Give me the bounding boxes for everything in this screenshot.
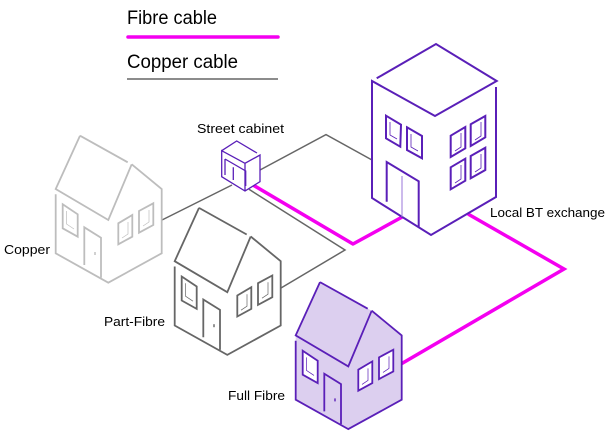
legend: copper cable: Copper cable: [127, 52, 238, 73]
full fibre house: [296, 282, 402, 429]
label: street cabinet: Street cabinet: [197, 121, 284, 136]
fibre cable: cabinet to exchange: [253, 185, 404, 244]
fibre cable: exchange to full fibre house: [401, 214, 564, 364]
legend: fibre cable: Fibre cable: [127, 8, 217, 29]
copper cable: cabinet to copper house: [162, 185, 232, 220]
copper house: [56, 136, 162, 283]
local BT exchange building: [372, 44, 497, 235]
label: part-fibre: Part-Fibre: [104, 314, 165, 329]
copper cable: cabinet to part-fibre house: [249, 189, 345, 288]
label: copper: Copper: [4, 242, 51, 257]
copper cable: cabinet to exchange: [260, 135, 372, 170]
label: full fibre: Full Fibre: [228, 388, 285, 403]
part-fibre house: [175, 208, 281, 355]
street cabinet: [222, 141, 260, 191]
label: local BT exchange: Local BT exchange: [490, 205, 605, 220]
